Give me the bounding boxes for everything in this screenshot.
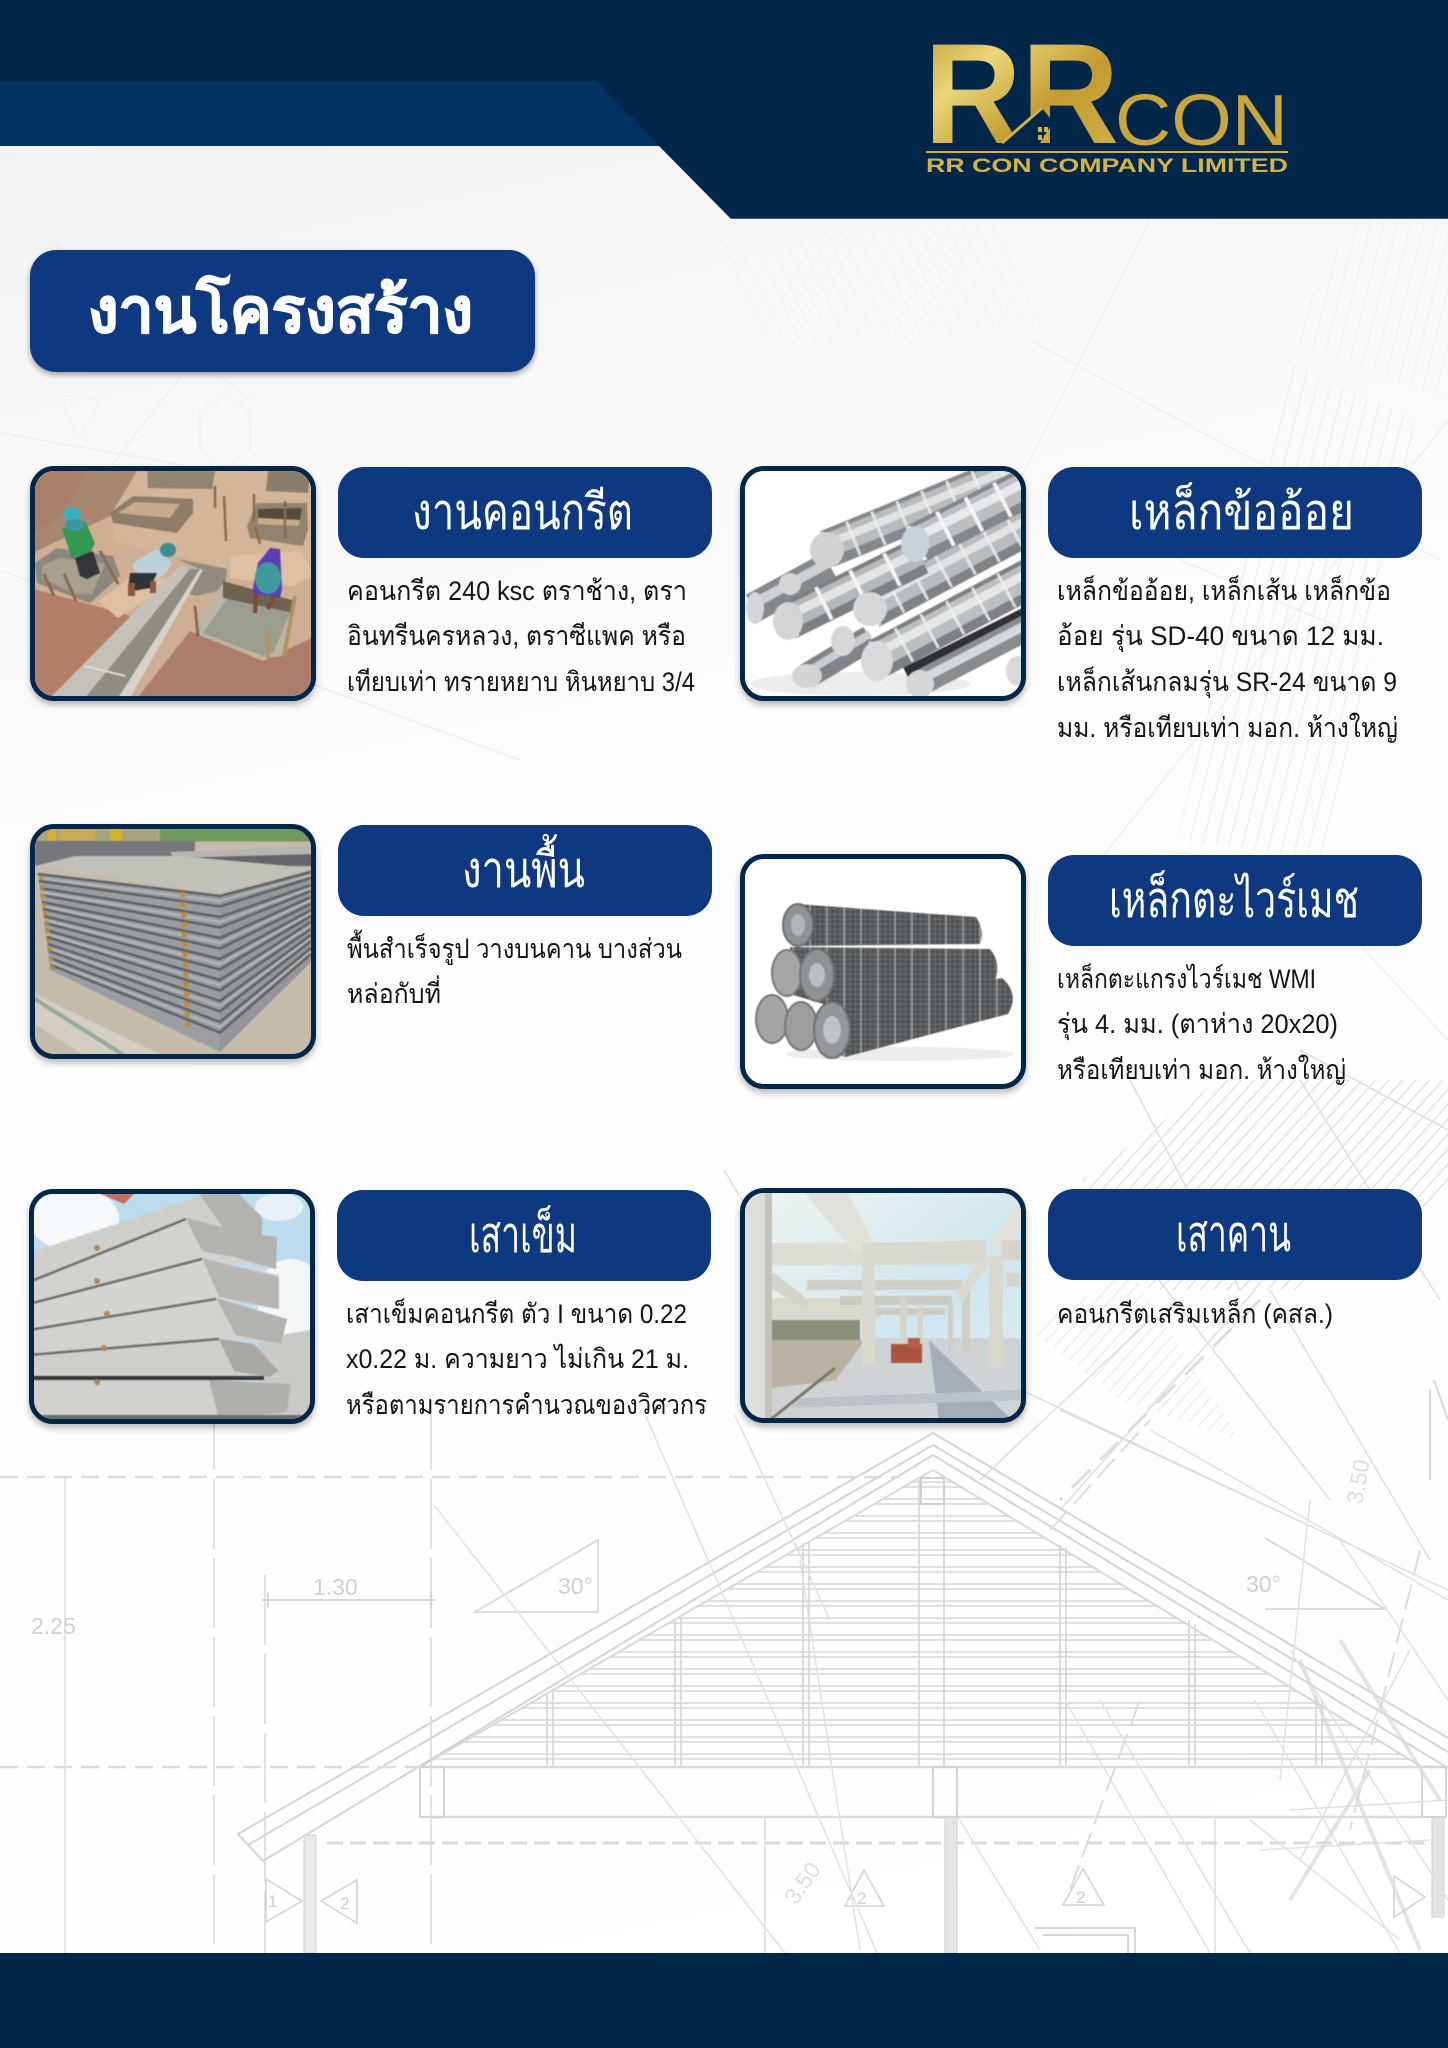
description: คอนกรีตเสริมเหล็ก (คสล.) <box>1057 1296 1333 1329</box>
panel: deformed rebar <box>736 466 1422 743</box>
heading pill <box>338 825 712 916</box>
description <box>346 1296 707 1420</box>
blueprint background: 2 <box>340 1894 349 1913</box>
description: หล่อกับที่ <box>347 975 441 1009</box>
title: งานโครงสร้าง <box>88 274 473 346</box>
photo: wire mesh rolls <box>740 854 1026 1089</box>
heading pill: เสาคาน <box>1176 1206 1291 1262</box>
logo: RR CON: CON <box>1115 81 1288 161</box>
panel: piles <box>25 1189 711 1432</box>
heading pill <box>1048 1189 1422 1280</box>
heading pill: เสาเข็ม <box>469 1205 577 1263</box>
panel: columns and beams <box>736 1188 1422 1431</box>
blueprint background: 1 <box>268 1892 277 1911</box>
footer band <box>0 1953 1448 2048</box>
description: เหล็กข้ออ้อย, เหล็กเส้น เหล็กข้อ <box>1057 573 1391 606</box>
heading pill: งานพื้น <box>462 834 585 898</box>
blueprint background: 1.30 <box>313 1574 358 1600</box>
title <box>30 250 535 372</box>
photo: deformed steel bars <box>740 466 1026 701</box>
description: รุ่น 4. มม. (ตาห่าง 20x20) <box>1057 1009 1338 1041</box>
description: เหล็กตะแกรงไวร์เมช WMI <box>1057 961 1316 994</box>
heading pill: เหล็กข้ออ้อย <box>1129 482 1354 540</box>
heading pill: งานคอนกรีต <box>412 484 633 540</box>
photo: concrete frame structure <box>740 1188 1026 1423</box>
description <box>1057 961 1346 1085</box>
blueprint background: 2 <box>1076 1888 1085 1907</box>
panel: concrete work <box>26 466 1420 709</box>
panel: wire mesh <box>736 854 1422 1097</box>
panel: floor work <box>26 824 712 1067</box>
description <box>1057 573 1398 743</box>
description: หรือเทียบเท่า มอก. ห้างใหญ่ <box>1057 1054 1346 1085</box>
description: x0.22 ม. ความยาว ไม่เกิน 21 ม. <box>346 1344 689 1374</box>
heading pill <box>1048 467 1422 558</box>
photo: precast floor planks <box>30 824 316 1059</box>
photo: concrete piles <box>29 1189 315 1424</box>
blueprint background: 2 <box>857 1889 866 1908</box>
blueprint background: 3.50 <box>1341 1457 1375 1506</box>
photo: pouring concrete on site <box>30 466 316 701</box>
logo: RR CON <box>924 38 1288 177</box>
blueprint background: 3.50 <box>779 1857 826 1909</box>
heading pill <box>1048 855 1422 946</box>
description: อินทรีนครหลวง, ตราซีแพค หรือ <box>347 621 686 651</box>
blueprint background: 30° <box>558 1573 593 1599</box>
logo: RR CON: RR CON COMPANY LIMITED <box>926 156 1288 177</box>
heading pill <box>337 1190 711 1281</box>
blueprint background: 30° <box>1246 1571 1281 1597</box>
blueprint background: 2.25 <box>31 1613 76 1639</box>
header band <box>0 0 1448 219</box>
description: คอนกรีต 240 ksc ตราช้าง, ตรา <box>347 576 687 606</box>
description <box>347 576 695 697</box>
description: อ้อย รุ่น SD-40 ขนาด 12 มม. <box>1057 621 1384 653</box>
description <box>347 929 682 1009</box>
heading pill <box>338 467 712 558</box>
